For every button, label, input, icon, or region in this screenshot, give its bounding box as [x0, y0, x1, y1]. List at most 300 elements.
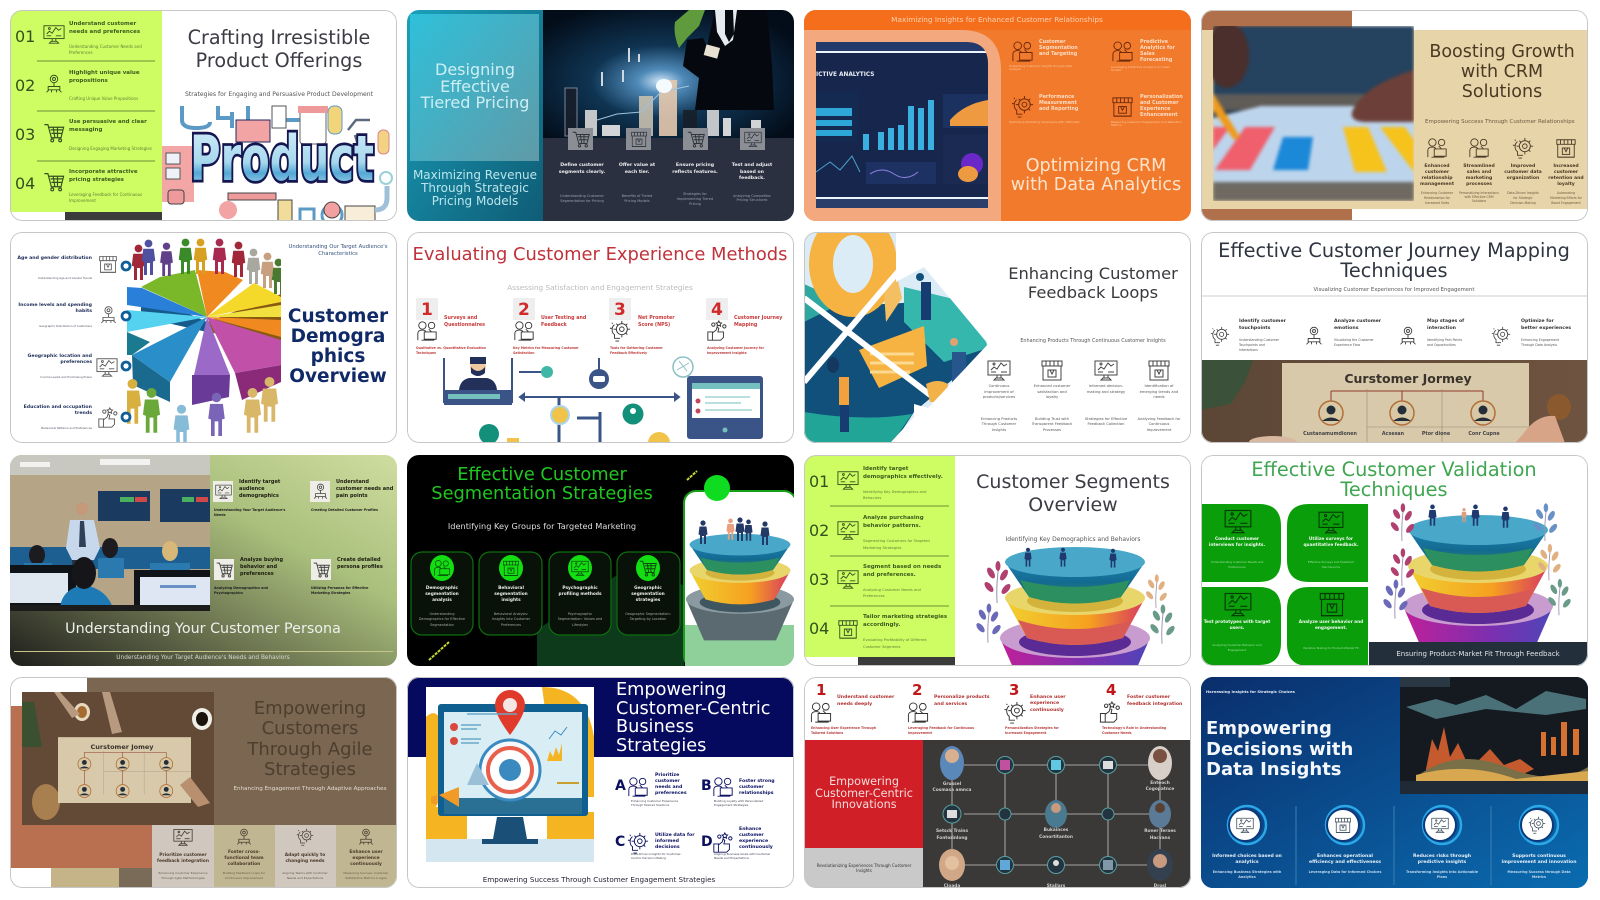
- action 4: Foster customer: [1127, 695, 1170, 700]
- segment card text 4: Geographic Segmentation:: [625, 612, 671, 616]
- letters A-D: B: [701, 778, 712, 794]
- block text 1: interviews for insights.: [1209, 543, 1265, 548]
- item 3: and preferences.: [863, 572, 916, 578]
- column 2: [1309, 854, 1381, 875]
- note 4: Customer Needs: [1102, 731, 1132, 735]
- heading and note: messaging: Use persuasive and clear: [69, 119, 147, 125]
- illustration: customer network: Cogopatnce: [1146, 786, 1174, 792]
- method 4: [734, 316, 782, 330]
- benefit 3: [1504, 164, 1542, 205]
- outcome 1: products/services: [983, 395, 1015, 399]
- note 3: Tools for Gathering Customer: [610, 346, 663, 350]
- heading and note: messaging: [69, 119, 152, 151]
- step numbers: 4: [711, 300, 723, 320]
- item D: continuously: [739, 845, 773, 850]
- persona item 4: persona profiles: [337, 564, 383, 570]
- step: features: Implementing Tiered: [677, 197, 713, 201]
- action 1: [157, 853, 209, 880]
- illustration: customer network: Enteoch: [1150, 780, 1170, 786]
- technique 4: Through Data Analysis: [1521, 343, 1557, 347]
- item 2: Marketing Strategies: [863, 546, 901, 550]
- block text 3: Test prototypes with target: [1204, 620, 1270, 625]
- item B: Foster strong: [739, 779, 775, 784]
- step: features: reflects features.: [672, 170, 718, 174]
- outcome 3: Informed decision-: [1089, 384, 1123, 388]
- note 2: Key Metrics for Measuring Customer: [513, 346, 579, 350]
- title: Feedback Loops: [1028, 283, 1158, 302]
- action 1: needs deeply: [837, 702, 872, 707]
- numbers 01-04: 02: [15, 76, 35, 95]
- column 1: Informed choices based on: [1212, 854, 1282, 859]
- slide: Customer Demographics Overview: [10, 232, 397, 443]
- title: Tiered Pricing: [421, 93, 529, 112]
- title: Overview: [289, 366, 387, 387]
- note 3: [1005, 726, 1059, 735]
- item: personalization: Personalization: [1140, 94, 1183, 100]
- note 2: Creating Detailed Customer Profiles: [311, 508, 378, 512]
- block text 2: quantitative feedback.: [1303, 543, 1359, 548]
- action 2: and services: [934, 702, 967, 707]
- technique 1: Touchpoints and: [1239, 343, 1265, 347]
- block text 3: [1204, 620, 1270, 653]
- note: personalization: [1111, 120, 1182, 127]
- illustration: product word art and left panel: [10, 10, 393, 220]
- panel title: [815, 776, 913, 811]
- footer subtitle: Empowering Success Through Customer Engagement Strategies: [483, 875, 715, 884]
- left item: income: [18, 302, 92, 328]
- subtitle: Visualizing Customer Experiences for Improved Engagement: [1314, 287, 1474, 293]
- action 1: Through Agile Methodologies: [161, 876, 205, 880]
- action 2: Foster cross-: [228, 850, 260, 855]
- panel subtitle: Revolutionizing Experiences Through Customer: [817, 863, 911, 868]
- benefit 1: Enhanced: [1424, 164, 1450, 169]
- block text 4: engagement.: [1315, 626, 1347, 631]
- benefit 1: Enhancing Customer: [1421, 191, 1453, 195]
- title: Strategies: [264, 759, 356, 780]
- title: Through Agile: [247, 739, 373, 760]
- step: features: Strategies for: [683, 192, 707, 196]
- technique 2: [1334, 319, 1381, 348]
- item A: [655, 773, 687, 797]
- benefit 4: loyalty: [1557, 182, 1575, 187]
- note 4: [1102, 726, 1166, 735]
- note 3: Psychographics: [214, 591, 243, 595]
- step numbers: 3: [1009, 681, 1019, 699]
- item: performance: Measurement: [1039, 100, 1077, 106]
- title: [420, 60, 529, 112]
- item A: preferences: [655, 791, 687, 796]
- technique 1: touchpoints: [1239, 326, 1270, 331]
- title: [616, 681, 770, 755]
- persona item 1: Identify target: [239, 479, 280, 485]
- method 1: Surveys and: [444, 316, 477, 321]
- technique 4: Enhancing Engagement: [1521, 338, 1559, 342]
- numbers 01-04: [809, 456, 829, 653]
- outcome 3: [1085, 384, 1127, 428]
- persona item 2: pain points: [336, 493, 368, 499]
- benefit 1: Increased Sales: [1425, 201, 1449, 205]
- heading and note: needs: Understand customer: [69, 21, 136, 27]
- item: segmentation: Customer: [1039, 39, 1066, 45]
- block text 2: [1303, 537, 1359, 570]
- note 1: Enhancing User Experience Through: [811, 726, 876, 730]
- persona item 3: preferences: [240, 571, 274, 577]
- illustration: customer network: Cosmasa amnca: [933, 787, 972, 793]
- note: segmentation: [1009, 64, 1072, 71]
- technique 2: emotions: [1334, 326, 1358, 331]
- item D: customer: [739, 833, 764, 838]
- benefit 3: customer data: [1504, 170, 1542, 175]
- illustration: customer network: [804, 677, 1191, 888]
- benefit 1: [1420, 164, 1454, 205]
- panel title: Customer-Centric: [815, 787, 913, 800]
- outcome 2: Processes: [1043, 428, 1061, 432]
- column 2: Enhances operational: [1317, 854, 1373, 859]
- illustration: feedback loop diamond: [804, 232, 1170, 443]
- benefit 2: processes: [1466, 182, 1492, 187]
- benefit 2: Solutions: [1472, 199, 1486, 203]
- step: features: [672, 162, 718, 206]
- footer text: Ensuring Product-Market Fit Through Feedback: [1396, 650, 1560, 658]
- subtitle: [413, 168, 537, 208]
- action 3: changing needs: [285, 859, 325, 864]
- column 4: improvement and innovation: [1502, 860, 1576, 865]
- illustration: customer network: Conortitanton: [1039, 834, 1073, 840]
- item 4: accordingly.: [863, 622, 900, 628]
- benefit 1: Relationships for: [1424, 196, 1450, 200]
- title: Empowering: [254, 698, 366, 719]
- item B: relationships: [739, 791, 774, 796]
- step: features: Pricing: [689, 202, 701, 206]
- note 1: [811, 726, 876, 735]
- persona item 1: demographics: [239, 493, 279, 499]
- left item: education: Behavioral Patterns and Preferences: [41, 426, 92, 430]
- technique 2: Visualizing the Customer: [1334, 338, 1374, 342]
- segment card text 2: Behavioral: [498, 586, 524, 591]
- note 4: [311, 586, 368, 596]
- action 2: Personalize products: [934, 695, 990, 700]
- note 1: Techniques: [416, 351, 436, 355]
- benefit 2: with Effective CRM: [1464, 195, 1494, 199]
- title: Demogra: [291, 326, 385, 347]
- column 3: Reduces risks through: [1413, 854, 1471, 859]
- illustration: table photo and colour blocks: [10, 677, 397, 888]
- heading and note: value: Highlight unique value: [69, 70, 140, 76]
- title: [431, 466, 653, 503]
- heading and note: needs: needs and preferences: [69, 29, 140, 35]
- technique 1: [1239, 319, 1286, 353]
- subtitle: Through Strategic: [421, 181, 529, 195]
- panel title: Innovations: [831, 798, 897, 811]
- action 3: experience: [1030, 701, 1059, 706]
- title: [1251, 460, 1537, 500]
- illustration: table photo and colour blocks: Curstomer Jomey: [90, 743, 154, 751]
- subtitle: Identifying Key Groups for Targeted Marketing: [448, 521, 636, 531]
- note: predictive: [1111, 65, 1170, 72]
- step: value: each tier.: [625, 170, 649, 174]
- title: Optimizing CRM: [1026, 156, 1166, 176]
- step: segments: Define customer: [560, 163, 604, 168]
- technique 3: and Opportunities: [1427, 343, 1456, 347]
- note B: [714, 800, 763, 807]
- segment card text 4: [625, 586, 671, 623]
- benefit 4: Marketing Efforts for: [1550, 196, 1582, 200]
- block text 2: Mechanisms: [1322, 565, 1340, 569]
- illustration: lime panel and funnel: [804, 455, 1191, 666]
- step numbers: [804, 681, 1191, 699]
- action 4: continuously: [350, 862, 382, 867]
- title: Segmentation Strategies: [431, 482, 653, 504]
- block text 1: Conduct customer: [1215, 537, 1259, 542]
- benefit 1: customer: [1425, 170, 1449, 175]
- item: personalization: Enhancement: [1140, 112, 1178, 118]
- action 1: [837, 695, 894, 708]
- illustration: feedback flow: [416, 298, 763, 442]
- illustration: customer network: Fontorinlong: [936, 835, 968, 841]
- slide: Effective Customer Journey Mapping Techniques: [1201, 232, 1588, 443]
- outcome 2: Building Trust with: [1035, 416, 1069, 420]
- note C: Data-Driven Insights for Customer-: [631, 852, 681, 856]
- column 1: Enhancing Business Strategies with: [1213, 870, 1281, 874]
- outcome 4: Improvement: [1147, 428, 1171, 432]
- heading and note: needs: Understanding Customer Needs and: [69, 44, 142, 49]
- note 2: Improvement: [908, 731, 932, 735]
- item: segmentation: [1039, 39, 1078, 57]
- note A: Through Tailored Solutions: [631, 803, 669, 807]
- outcome 3: making and strategy: [1087, 390, 1125, 394]
- title: [1218, 241, 1570, 281]
- persona item 3: [240, 557, 283, 578]
- numbers 01-04: 01: [809, 472, 829, 490]
- block text 3: users.: [1230, 626, 1244, 631]
- item 3: Segment based on needs: [863, 564, 941, 570]
- note 4: Improvement Insights: [707, 351, 747, 355]
- item: performance: [1039, 94, 1078, 112]
- slide: Empowering Customer-Centric Innovations: [804, 677, 1191, 888]
- slide: Boosting Growth with CRM Solutions: [1201, 10, 1588, 221]
- left item: education: trends: [75, 411, 92, 416]
- note: segmentation: Unleashing Customer Insights through Data: [1009, 64, 1072, 68]
- numbers 01-04: [15, 26, 35, 193]
- note A: Enhancing Customer Experience: [631, 799, 678, 803]
- title: Understanding Your Customer Persona: [65, 621, 341, 637]
- item C: decisions: [655, 845, 680, 850]
- column 2: Leveraging Data for Informed Choices: [1309, 870, 1381, 874]
- outcome 4: Analyzing Feedback for: [1138, 416, 1180, 420]
- outcome 1: improvement of: [984, 390, 1014, 394]
- step numbers: 4: [1106, 681, 1116, 699]
- method 3: Net Promoter: [638, 316, 675, 321]
- item 4: Customer Segments: [863, 644, 901, 648]
- column 3: predictive insights: [1418, 860, 1466, 865]
- title: Empowering: [1206, 718, 1332, 739]
- action 2: functional team: [224, 856, 264, 861]
- title: Enhancing Customer: [1008, 264, 1178, 283]
- subtitle: Assessing Satisfaction and Engagement Strategies: [507, 283, 693, 292]
- title: Overview: [1028, 494, 1118, 516]
- item: performance: and Reporting: [1039, 106, 1078, 112]
- title: Effective Customer Journey Mapping: [1218, 239, 1570, 262]
- benefit 2: Personalizing Interactions: [1459, 191, 1499, 195]
- item C: informed: [655, 839, 679, 844]
- title: [188, 26, 370, 72]
- title: Crafting Irresistible: [188, 26, 370, 49]
- item: segmentation: and Targeting: [1039, 51, 1077, 57]
- benefit 3: for Strategic: [1513, 196, 1533, 200]
- note D: Aligning Business Goals with Customer: [714, 852, 770, 856]
- item: performance: Performance: [1039, 94, 1074, 100]
- segment card text 1: segmentation: [425, 592, 459, 597]
- technique 1: Interactions: [1239, 348, 1258, 352]
- illustration: customer network: Grussel: [943, 781, 962, 787]
- column 1: analytics: [1235, 860, 1259, 865]
- title: with CRM: [1461, 62, 1543, 82]
- title: phics: [311, 346, 365, 367]
- note 1: Understanding Your Target Audience's: [214, 508, 285, 512]
- segment card text 2: insights: [501, 598, 521, 603]
- outcome 4: [1138, 384, 1180, 433]
- title: Techniques: [1340, 259, 1448, 282]
- segment card text 2: segmentation: [494, 592, 528, 597]
- note D: [714, 853, 770, 860]
- item D: [739, 827, 773, 851]
- action 3: continuously: [1030, 708, 1064, 713]
- title: Customer-Centric: [616, 699, 770, 719]
- illustration: analytics dashboard: [804, 10, 1191, 221]
- slide: Evaluating Customer Experience Methods: [407, 232, 794, 443]
- persona item 1: [239, 479, 280, 500]
- note: predictive: Leveraging Predictive Analytics for Sales: [1111, 65, 1170, 69]
- column 4: Metrics: [1532, 875, 1546, 879]
- step: adjust: Test and adjust: [732, 163, 772, 168]
- step: segments: Understanding Customer: [560, 194, 604, 198]
- item C: Utilize data for: [655, 833, 695, 838]
- note: personalization: Measuring Customer Engagement and Retention: [1111, 120, 1182, 124]
- slide: Effective Customer Segmentation Strategies: [407, 455, 794, 666]
- step: value: Pricing Models: [624, 199, 650, 203]
- benefit 3: Improved: [1511, 164, 1535, 169]
- title: Evaluating Customer Experience Methods: [413, 244, 787, 265]
- heading and note: value: [69, 70, 140, 101]
- segment card text 4: segmentation: [631, 592, 665, 597]
- benefit 2: [1459, 164, 1499, 203]
- technique 4: [1521, 319, 1571, 348]
- numbers 01-04: 04: [809, 619, 829, 638]
- illustration: customer network: Hacvans: [1150, 835, 1171, 841]
- note C: Centric Decision Making: [631, 856, 666, 860]
- benefit 4: Boost Engagement: [1551, 201, 1581, 205]
- outcome 1: Through Customer: [982, 422, 1016, 426]
- note 3: Increased Engagement: [1005, 731, 1046, 735]
- column 4: Measuring Success through Data: [1507, 870, 1571, 874]
- column 3: Plans: [1437, 875, 1447, 879]
- note: personalization: Metrics: [1111, 123, 1122, 127]
- outcome 3: Strategies for Effective: [1085, 416, 1127, 420]
- action 2: Continuous Improvement: [225, 876, 263, 880]
- block text 4: Iterative Testing for Product-Market Fit: [1303, 646, 1359, 650]
- segment card text 2: Insights into Customer: [492, 617, 530, 621]
- step: value: Offer value at: [619, 163, 655, 168]
- column 3: Transforming Insights into Actionable: [1406, 870, 1478, 874]
- note D: Needs and Expectations: [714, 856, 749, 860]
- subtitle: Enhancing Products Through Continuous Customer Insights: [1020, 338, 1166, 344]
- title: Data Insights: [1206, 759, 1342, 780]
- item 3: [863, 563, 941, 599]
- step numbers: 3: [614, 300, 626, 320]
- benefit 4: customer: [1554, 170, 1578, 175]
- note 1: [214, 508, 285, 518]
- step: adjust: [732, 162, 772, 202]
- segment card text 3: Lifestyles: [572, 623, 588, 627]
- technique 3: [1427, 319, 1464, 348]
- note 1: Tailored Solutions: [811, 731, 843, 735]
- heading and note: messaging: messaging: [69, 127, 102, 133]
- technique 2: Experience Flow: [1334, 343, 1360, 347]
- title: Business: [616, 717, 694, 737]
- illustration: journey map photo: Acsesan: [1382, 431, 1405, 437]
- step numbers: 2: [518, 300, 530, 320]
- note 4: Analyzing Customer Journey for: [707, 346, 764, 350]
- heading and note: value: propositions: [69, 78, 108, 84]
- step numbers: [421, 300, 723, 320]
- illustration: customer network: Bukainces: [1044, 827, 1069, 833]
- block text 2: Utilize surveys for: [1309, 537, 1353, 542]
- action 4: feedback integration: [1127, 702, 1182, 707]
- technique 2: Analyze customer: [1334, 319, 1381, 324]
- title: [1429, 42, 1575, 102]
- left item: geography: Geographic location and: [28, 354, 92, 359]
- illustration: green blocks, funnel and footer: [1201, 455, 1588, 666]
- benefit 4: Automating: [1557, 191, 1575, 195]
- method 2: [541, 315, 586, 328]
- segment card text 3: profiling methods: [558, 592, 602, 597]
- outcome 2: loyalty: [1046, 395, 1058, 399]
- note 3: Personalization Strategies for: [1005, 726, 1059, 730]
- segment card text 3: Psychographic: [562, 586, 598, 591]
- illustration: target monitor: [407, 677, 794, 888]
- item 1: Behaviors: [863, 496, 881, 500]
- method 3: [638, 315, 675, 328]
- action 4: Enhance user: [349, 850, 383, 855]
- note 2: [513, 346, 579, 355]
- segment card text 1: analysis: [432, 598, 452, 603]
- outcome 4: Continuous: [1149, 422, 1169, 426]
- segment card text 4: strategies: [636, 598, 660, 603]
- eyebrow text: Harnessing Insights for Strategic Choices: [1206, 689, 1295, 694]
- title: with Data Analytics: [1011, 174, 1181, 194]
- item C: [655, 833, 695, 851]
- note 4: [707, 346, 764, 355]
- method 3: Score (NPS): [638, 323, 670, 328]
- outcome 1: Continuous: [989, 384, 1009, 388]
- numbers 01-04: 04: [15, 174, 35, 193]
- outcome 2: Transparent Feedback: [1032, 422, 1072, 426]
- technique 3: Identifying Pain Points: [1427, 338, 1462, 342]
- segment card text 1: [419, 586, 465, 628]
- heading and note: pricing: Incorporate attractive: [69, 169, 138, 175]
- slide: Designing Effective Tiered Pricing: [407, 10, 794, 221]
- item 2: Segmenting Customers for Targeted: [863, 539, 930, 543]
- slide: Enhancing Customer Feedback Loops: [804, 232, 1191, 443]
- column 3: [1406, 854, 1478, 880]
- benefit 3: Data-Driven Insights: [1507, 191, 1539, 195]
- panel subtitle: Insights: [856, 868, 872, 873]
- segment card text 1: Segmentation: [430, 623, 454, 627]
- outcome 4: emerging trends and: [1140, 390, 1178, 394]
- title: [1011, 156, 1181, 194]
- item 2: behavior patterns.: [863, 523, 921, 529]
- benefit 3: organization: [1507, 176, 1539, 181]
